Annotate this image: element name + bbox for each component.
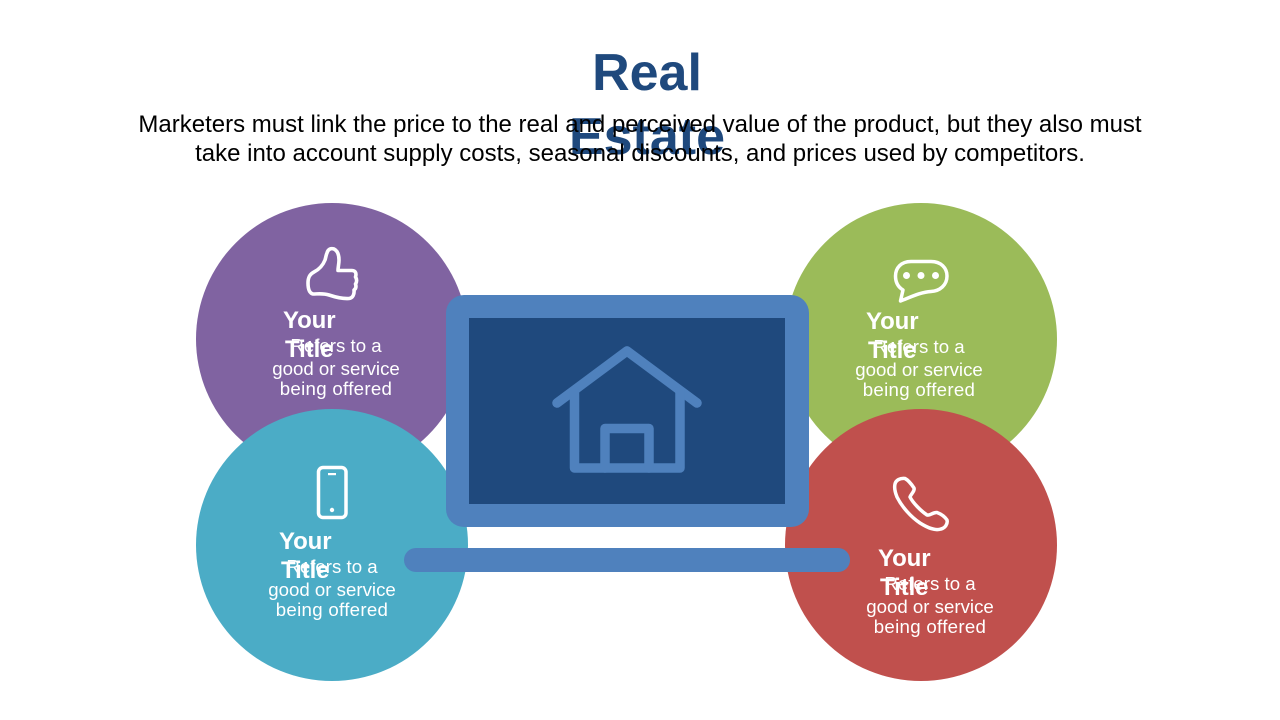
icon: smartphone <box>318 468 346 518</box>
text: green circle <box>855 308 983 400</box>
text: teal circle <box>268 528 396 620</box>
text: take into account supply costs, seasonal discounts, and prices used by competitors. <box>195 140 1085 167</box>
text: Title <box>868 337 916 364</box>
title <box>569 44 725 166</box>
text: Marketers must link the price to the real and perceived value of the product, but they also must <box>138 111 1142 138</box>
text: good or service <box>866 596 994 617</box>
text: Refers to a <box>884 573 976 594</box>
icon: telephone <box>895 478 947 530</box>
text: Refers to a <box>286 556 378 577</box>
circle: purple <box>196 203 468 475</box>
text: good or service <box>855 359 983 380</box>
text: Refers to a <box>290 335 382 356</box>
text: Real <box>592 44 702 102</box>
circle: green <box>785 203 1057 475</box>
text: Title <box>285 336 333 363</box>
icon: thumbs up <box>308 249 357 299</box>
text: Your <box>878 545 930 572</box>
circle: teal <box>196 409 468 681</box>
text: Your <box>279 528 332 555</box>
text: Refers to a <box>873 336 965 357</box>
text: being offered <box>874 616 986 637</box>
text: Your <box>866 308 918 335</box>
text: being offered <box>276 599 388 620</box>
text: Your <box>283 307 336 334</box>
icon: speech bubble <box>896 262 947 301</box>
laptop <box>404 295 850 572</box>
text: good or service <box>268 579 396 600</box>
text: good or service <box>272 358 400 379</box>
text: purple circle <box>272 307 400 399</box>
text: Estate <box>569 108 725 166</box>
text: red circle <box>866 545 994 637</box>
text: Title <box>281 557 329 584</box>
icon: house <box>557 351 697 468</box>
text: Title <box>880 574 928 601</box>
subtitle text <box>138 111 1142 167</box>
text: being offered <box>280 378 392 399</box>
text: being offered <box>863 379 975 400</box>
circle: red <box>785 409 1057 681</box>
